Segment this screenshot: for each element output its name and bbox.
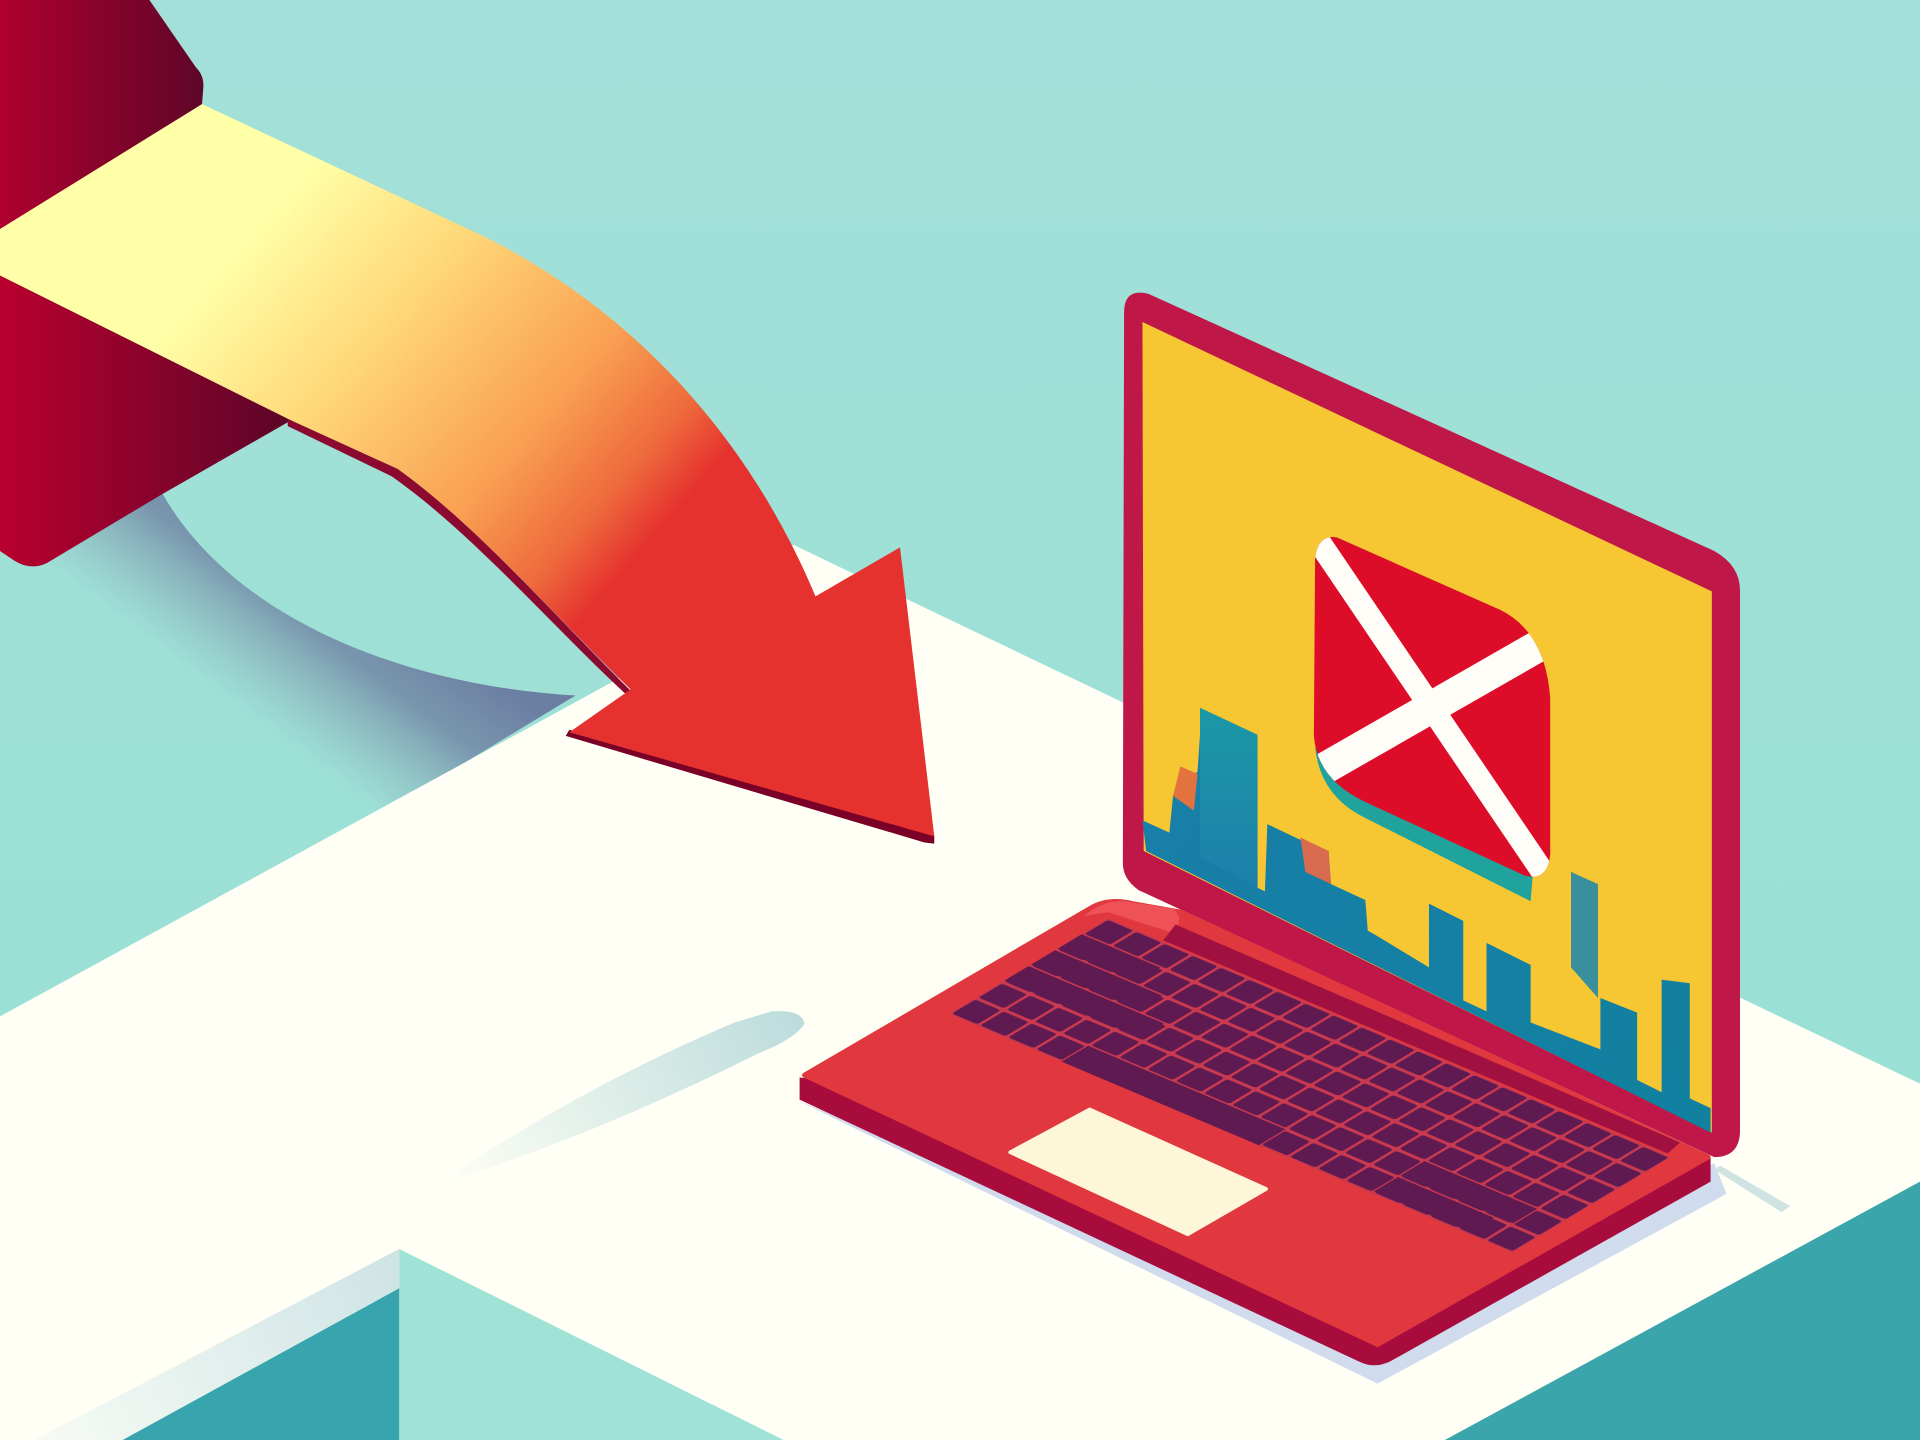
- arrow ribbon with head: [0, 104, 934, 836]
- laptop screen: [1123, 293, 1740, 1157]
- base top surface: [804, 901, 1708, 1344]
- arrow head dark edge: [566, 730, 934, 844]
- soft streak shadow on platform: [435, 1011, 804, 1185]
- icon teal shadow: [1315, 747, 1533, 901]
- hinge flap highlight: [1084, 901, 1179, 933]
- platform notch: lower left: [34, 1249, 784, 1440]
- skyline: [1142, 708, 1711, 1133]
- screen frame: [1123, 293, 1740, 1157]
- long keys: [949, 934, 1617, 1241]
- skyline silhouette: [1142, 735, 1711, 1133]
- keyboard key grid: [949, 918, 1671, 1253]
- laptop: [796, 293, 1790, 1384]
- skyline orange block right: [1300, 838, 1331, 884]
- laptop ground shadow: [796, 1100, 1727, 1384]
- base side edge: [800, 1078, 1711, 1365]
- arrow lower dark edge: [288, 419, 633, 693]
- arrow block: upper: [0, 0, 203, 233]
- arrow shadow on the ground: [0, 492, 576, 833]
- keyboard: [949, 918, 1671, 1253]
- arrow block: lower: [0, 272, 294, 566]
- hinge dark strip: [1163, 924, 1680, 1153]
- screen yellow display: [1142, 322, 1712, 1133]
- white platform: [0, 545, 1920, 1440]
- trackpad: [1010, 1109, 1266, 1234]
- small ground streak: [1714, 1166, 1790, 1212]
- icon white X: [1315, 537, 1550, 877]
- skyline tower: [1200, 708, 1258, 888]
- red X icon: [1314, 537, 1550, 902]
- 3D falling arrow: [0, 0, 934, 844]
- skyline slim column: [1571, 872, 1598, 998]
- laptop base: [800, 901, 1711, 1365]
- skyline orange block left: [1173, 767, 1198, 811]
- platform corner: lower right: [1445, 1182, 1920, 1440]
- icon red rounded diamond: [1314, 537, 1550, 877]
